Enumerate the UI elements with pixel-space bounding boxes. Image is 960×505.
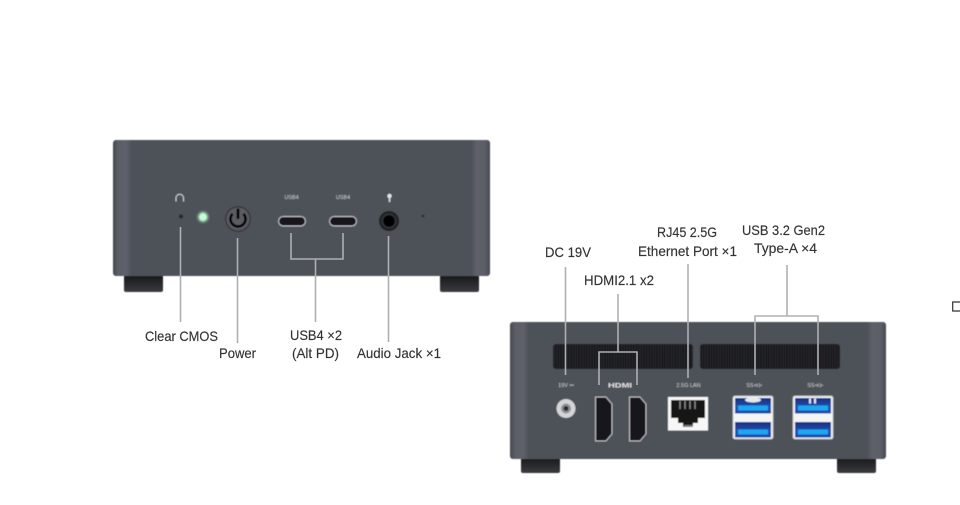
power button [225, 206, 251, 232]
audio icon [387, 194, 392, 202]
label: RJ45 Ethernet: RJ45 2.5G [657, 224, 717, 240]
vent right [700, 344, 840, 369]
label: HDMI2.1 x2: HDMI2.1 x2 [584, 272, 654, 288]
label: USB4 ×2 (Alt PD): (Alt PD) [292, 345, 339, 361]
DC jack [556, 399, 576, 418]
USB4 label right: USB4 [336, 195, 350, 201]
rear body [510, 322, 886, 459]
front leader lines [180, 227, 388, 343]
front body [113, 140, 490, 276]
label: RJ45 Ethernet [638, 224, 737, 259]
USB-C port right [330, 216, 356, 226]
HDMI port right [630, 397, 646, 441]
USB-A stack left [733, 396, 773, 439]
SS USB label right: SS⊲⊱ [807, 382, 824, 389]
RJ45 port [668, 397, 708, 430]
USB4 label left: USB4 [284, 195, 299, 201]
clear CMOS hole [179, 214, 183, 218]
label: Clear CMOS: Clear CMOS [145, 328, 218, 344]
label: USB 3.2 Gen2 [742, 222, 825, 256]
label: USB 3.2 Gen2: Type-A ×4 [754, 240, 817, 256]
rear leader lines [566, 264, 818, 385]
small box at right edge [953, 302, 960, 311]
headphone icon [176, 194, 184, 202]
label: USB 3.2 Gen2: USB 3.2 Gen2 [742, 222, 825, 238]
label: Power: Power [219, 345, 256, 361]
rear feet [521, 457, 876, 473]
rear device [510, 322, 886, 473]
status LED [198, 212, 208, 222]
HDMI port left [596, 397, 612, 441]
audio jack [379, 211, 399, 231]
SS USB label left: SS⊲⊱ [746, 382, 763, 389]
label: USB4 ×2 (Alt PD) [290, 327, 342, 361]
USB-A stack right [793, 396, 833, 439]
front device [113, 140, 490, 292]
HDMI label: HDMI [608, 382, 632, 390]
19V label: 19V ⎓ [558, 383, 574, 389]
label: Audio Jack ×1: Audio Jack ×1 [357, 345, 441, 361]
small hole [422, 215, 424, 217]
vent left [553, 344, 693, 369]
USB-C port left [278, 216, 306, 226]
label: USB4 ×2 (Alt PD): USB4 ×2 [290, 327, 342, 343]
label: RJ45 Ethernet: Ethernet Port ×1 [638, 243, 737, 259]
2.5G LAN label: 2.5G LAN [676, 383, 701, 389]
front feet [124, 275, 479, 292]
label: DC 19V: DC 19V [545, 244, 592, 260]
